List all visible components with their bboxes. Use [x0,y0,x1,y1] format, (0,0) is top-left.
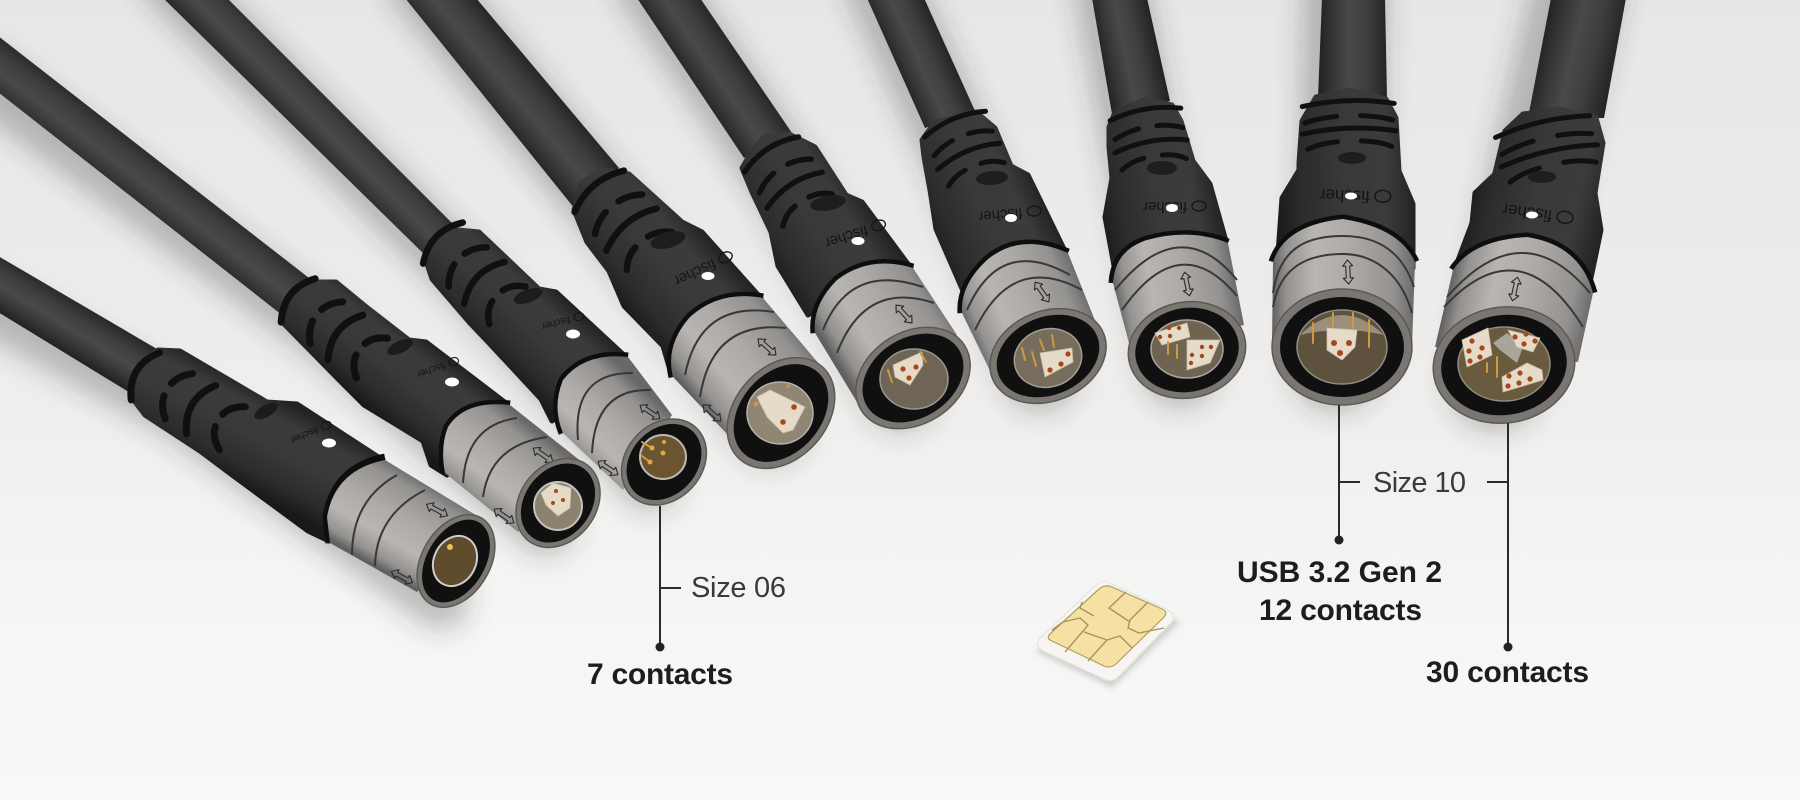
boot and strain relief [922,112,1065,291]
connector 4 [405,0,857,490]
connector 1: size 06 [0,256,511,621]
dimple [975,170,1009,186]
boot and strain relief [574,170,761,370]
label: Size 06: Size 06 [691,572,786,604]
connector face [499,442,617,564]
dimple [649,228,687,252]
label: USB 3.2 Gen 2: USB 3.2 Gen 2 [1237,556,1442,589]
connector face [401,501,511,621]
metal shell [1272,219,1415,347]
label: 12 contacts: 12 contacts [1259,594,1422,627]
strain relief slots [1493,111,1601,183]
cable [637,0,792,158]
indicator dot [1345,192,1357,200]
metal shell [1435,237,1593,362]
strain relief slots [1301,99,1397,150]
cable [867,0,975,128]
cable [1092,0,1170,114]
logo: fischer [1319,185,1370,206]
cable [163,0,457,255]
cable [405,0,619,209]
strain relief slots [569,164,675,272]
logo [288,418,333,445]
connector 6 [867,0,1120,420]
logo: fischer [978,204,1023,225]
logo: fischer [823,221,870,251]
logo [823,216,888,251]
boot and strain relief [425,229,625,421]
boot and strain relief [742,134,911,315]
cable [0,256,157,394]
callout: 30 contacts [1426,423,1589,689]
indicator dot [1005,214,1017,222]
connector face [1272,289,1412,405]
connector 2: size 06 [0,36,617,564]
logo: fischer [288,423,320,445]
connector face [705,336,857,490]
metal shell [815,264,957,412]
dimple [1147,161,1177,175]
connector face [976,292,1120,420]
indicator dot [322,438,336,448]
metal shell [558,356,672,490]
indicator dot [1166,204,1178,212]
indicator dot [702,272,714,280]
dimple [1528,171,1556,183]
connector 5 [637,0,989,449]
strain relief slots [122,347,247,453]
callout: size 06 [587,506,786,691]
boot and strain relief [132,350,383,541]
boot and strain relief [1457,109,1603,278]
strain relief slots [416,216,528,326]
indicator dot [445,378,459,386]
logo: fischer [415,359,447,380]
logo: fischer [539,313,571,332]
strain relief slots [922,106,1008,188]
SIM card for scale [1036,582,1180,688]
metal shell [327,458,484,592]
logo [1501,200,1574,228]
strain relief slots [740,131,835,228]
dimple [252,399,280,423]
connector 9: size 10, 30 contacts [1426,0,1626,432]
dimple [512,285,544,307]
cast shadows [0,0,1580,600]
dimple [385,336,415,358]
strain relief slots [1108,103,1190,171]
dimple [1338,152,1366,164]
logo: fischer [671,255,719,289]
label: 30 contacts: 30 contacts [1426,656,1589,689]
connector face [837,307,989,449]
cable [1528,0,1626,118]
connector face [1121,292,1253,408]
boot and strain relief [1105,99,1226,271]
dimple [809,192,847,214]
boot and strain relief [282,282,506,475]
logo [415,354,460,380]
connector 8: size 10, USB 3.2 Gen 2, 12 contacts [1272,0,1415,405]
connector 7 [1092,0,1253,408]
cable [0,36,309,315]
logo: fischer [1143,198,1187,215]
connector face [604,402,724,522]
indicator dot [852,237,864,245]
boot and strain relief [1275,90,1413,291]
metal shell [1113,235,1244,347]
indicator dot [1526,212,1538,218]
connector 3: size 06, 7 contacts [163,0,724,522]
strain relief slots [273,272,389,380]
metal shell [962,244,1098,385]
cable [1318,0,1387,98]
metal shell [443,404,592,532]
metal shell [671,296,820,435]
connector face [1426,298,1582,432]
label: 7 contacts: 7 contacts [587,658,733,691]
logo [539,310,585,332]
logo [978,202,1042,225]
label: Size 10: Size 10 [1373,467,1466,499]
callout: size 10, USB 12 contacts [1237,405,1466,627]
logo: fischer [1501,200,1553,225]
logo [671,247,736,289]
logo [1319,185,1391,207]
indicator dot [566,330,580,338]
